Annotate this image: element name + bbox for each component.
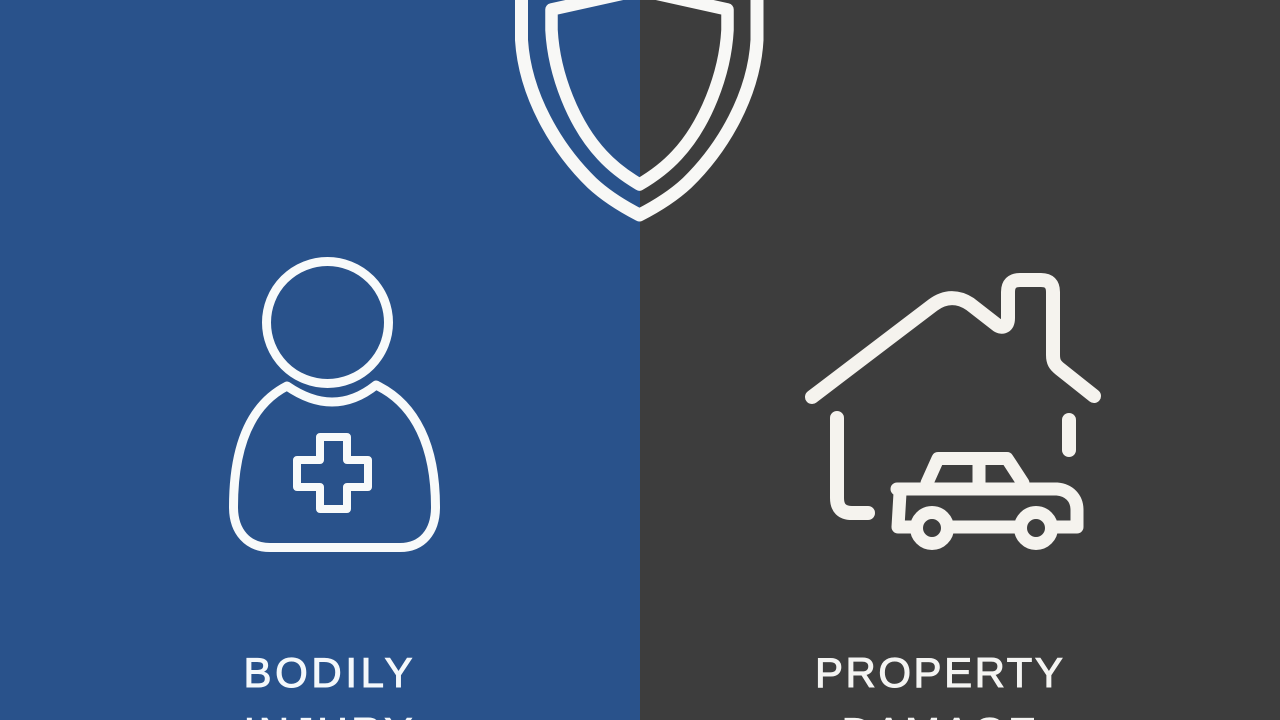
shield outer outline [522, 0, 757, 215]
house left wall [837, 418, 868, 513]
panel: bodily injury background [0, 0, 640, 720]
heading: property: PROPERTY [815, 649, 1065, 696]
house right wall [1062, 420, 1076, 450]
house roof and chimney [812, 280, 1094, 397]
person head [266, 262, 388, 384]
icon: house with car [812, 280, 1094, 544]
car body [897, 489, 1077, 527]
icon: person with medical cross [234, 262, 436, 548]
medical cross [297, 437, 368, 509]
car front wheel [916, 512, 948, 544]
icon: shield [522, 0, 757, 215]
shield inner outline [552, 0, 728, 184]
panel: property damage background [640, 0, 1280, 720]
car [897, 458, 1077, 544]
car rear wheel [1020, 512, 1052, 544]
car cabin [927, 458, 1023, 483]
person body [234, 385, 436, 548]
heading: bodily: BODILY [244, 649, 416, 696]
car window pillar [972, 460, 986, 487]
